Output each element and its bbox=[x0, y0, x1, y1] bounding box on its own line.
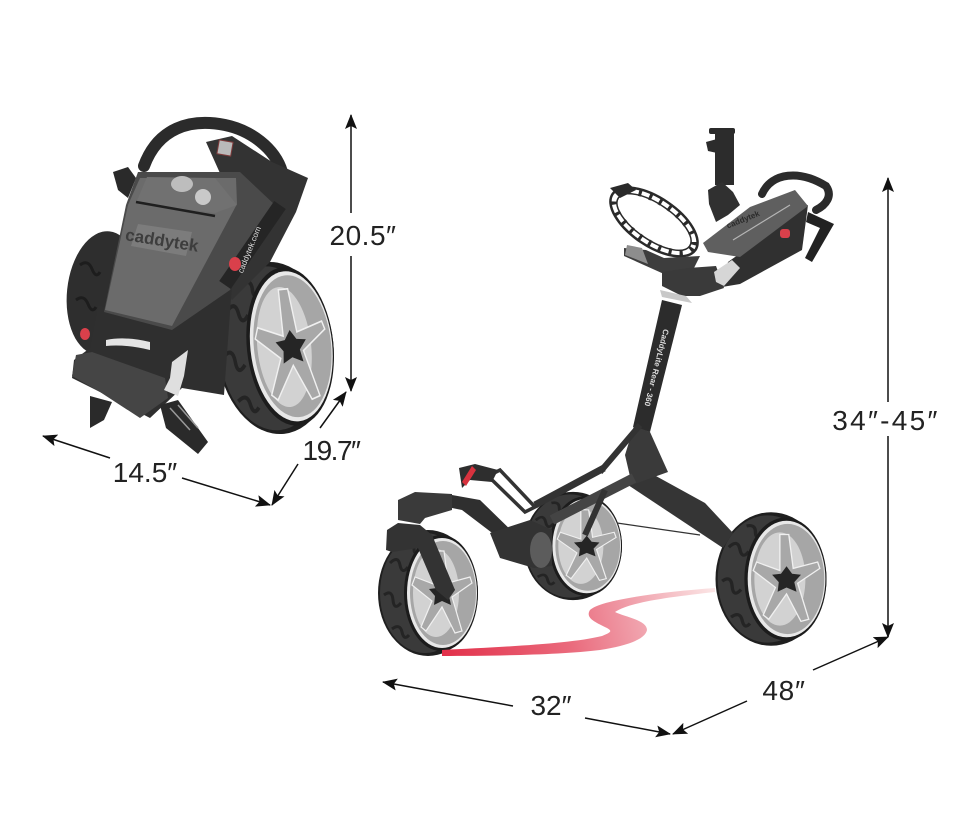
folded left wheel bbox=[61, 228, 145, 358]
grip pad bbox=[625, 245, 648, 264]
lock plate bbox=[530, 532, 552, 568]
dimension: folded width bbox=[43, 436, 270, 505]
back wheel bbox=[524, 492, 622, 600]
front lower tube bbox=[552, 478, 634, 520]
dimension: folded depth bbox=[272, 392, 361, 505]
right wheel bbox=[716, 512, 826, 646]
folded small red button bbox=[80, 328, 90, 340]
front head bbox=[398, 492, 452, 524]
mast bbox=[633, 300, 682, 432]
front fork bbox=[386, 523, 455, 600]
console logo: caddytek bbox=[725, 209, 761, 230]
console red button bbox=[780, 229, 790, 238]
folded red button bbox=[229, 257, 241, 271]
strut tube bbox=[600, 425, 640, 472]
mast label: CaddyLite Rear - 360 bbox=[642, 328, 670, 408]
folded rear body bbox=[205, 136, 308, 300]
console highlight bbox=[733, 205, 790, 240]
dimension: open length bbox=[673, 637, 888, 734]
dimension: open height: 34″-45″ bbox=[832, 405, 940, 436]
ball holder ring bbox=[599, 174, 709, 270]
folded side knob bbox=[113, 167, 136, 198]
folding joint bbox=[662, 266, 724, 296]
umbrella holder bbox=[706, 128, 740, 222]
white clip bbox=[714, 260, 740, 286]
wire bbox=[617, 523, 700, 535]
folded foot stand bbox=[90, 396, 112, 428]
folded axle body bbox=[72, 352, 168, 418]
dimension: folded width: 14.5″ bbox=[113, 457, 177, 488]
folded cart bbox=[61, 123, 342, 454]
folded foot plate bbox=[160, 400, 208, 454]
folded label tag bbox=[217, 140, 233, 156]
dimension: open width bbox=[383, 682, 670, 734]
panel logo: caddytek bbox=[124, 225, 200, 256]
mast collar bbox=[660, 290, 692, 303]
folded white lever bbox=[164, 350, 188, 396]
panel cap bbox=[171, 176, 193, 192]
dimension: folded height: 20.5″ bbox=[330, 220, 396, 251]
swivel path bbox=[442, 588, 715, 656]
folded handle bbox=[144, 123, 282, 204]
folding foot lever bbox=[459, 464, 535, 512]
dimension: open length: 48″ bbox=[762, 675, 806, 706]
hand grip bbox=[624, 248, 700, 276]
console bracket bbox=[805, 212, 834, 262]
folded site label: caddytek.com bbox=[236, 225, 263, 274]
dimension: folded depth: 19.7″ bbox=[303, 435, 361, 466]
folded lower frame bbox=[72, 285, 232, 418]
front link bbox=[452, 495, 516, 545]
folded frame arm bbox=[225, 205, 280, 285]
folded right wheel bbox=[208, 256, 342, 440]
support leg bbox=[585, 490, 605, 535]
dimension: open width: 32″ bbox=[530, 690, 572, 721]
console top bbox=[703, 190, 808, 257]
central strut bbox=[625, 426, 668, 485]
rear body bbox=[490, 520, 552, 568]
folded panel bbox=[104, 172, 275, 330]
panel badge bbox=[195, 189, 211, 205]
rear leg bbox=[628, 470, 733, 548]
console handle bbox=[762, 176, 829, 210]
folded white clip bbox=[106, 338, 150, 350]
standing cart bbox=[378, 128, 834, 656]
front wheel bbox=[378, 530, 478, 656]
console lower bbox=[722, 205, 808, 287]
panel lid bbox=[136, 177, 237, 213]
front upper tube bbox=[535, 468, 604, 505]
